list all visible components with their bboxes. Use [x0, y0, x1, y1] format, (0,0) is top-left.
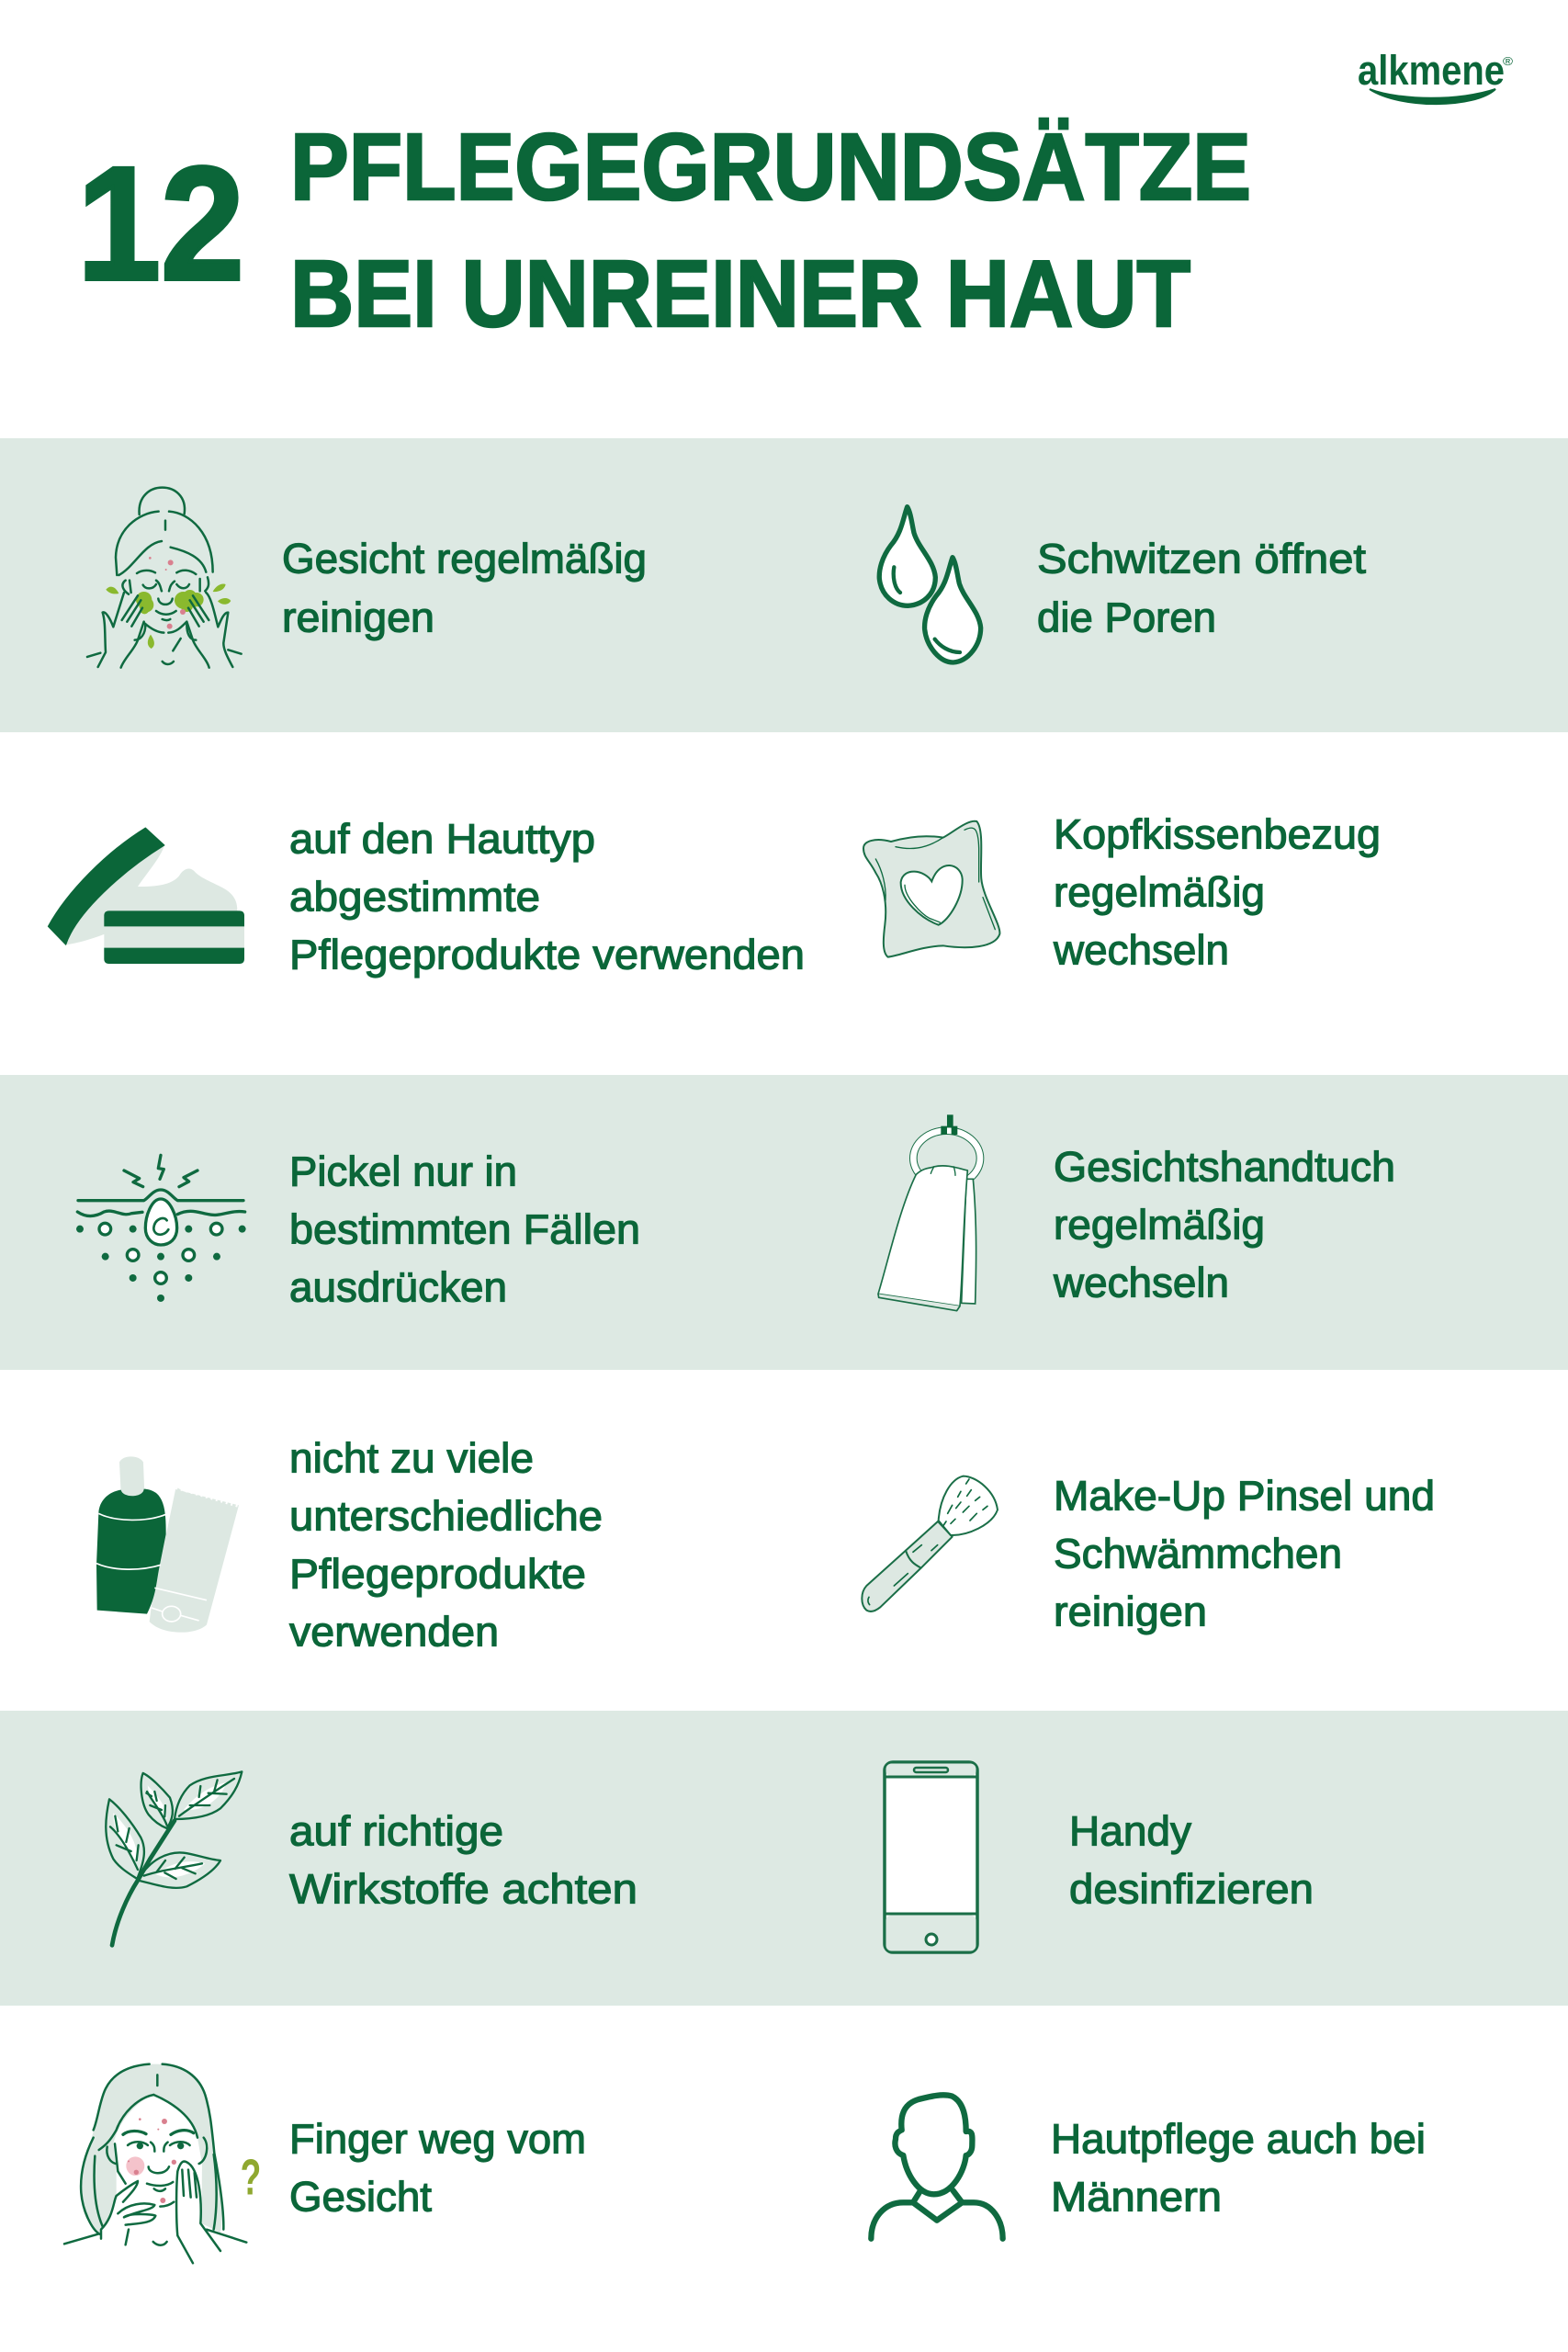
text: Finger weg vom Gesicht: Gesicht	[289, 2174, 432, 2220]
panel: row 6	[0, 2006, 1568, 2352]
number 12: 12	[77, 134, 244, 314]
text: auf richtige Wirkstoffe achten	[289, 1808, 637, 1913]
text: Kopfkissenbezug regelmäßig wechseln: Kopfkissenbezug	[1054, 810, 1381, 858]
text: Kopfkissenbezug regelmäßig wechseln	[1053, 810, 1381, 974]
icon: cream jar	[48, 828, 244, 964]
icon: woman cleansing face	[87, 488, 242, 668]
text: Gesichtshandtuch regelmäßig wechseln: regelmäßig	[1054, 1202, 1265, 1248]
icon: towel on ring	[878, 1114, 980, 1311]
title: BEI UNREINER HAUT	[290, 241, 1190, 346]
text: Schwitzen öffnet die Poren: Schwitzen öffnet	[1037, 535, 1367, 582]
text: nicht zu viele unterschiedliche Pflegeprodukte verwenden: Pflegeprodukte	[289, 1551, 586, 1597]
text: nicht zu viele unterschiedliche Pflegeprodukte verwenden: unterschiedliche	[289, 1492, 603, 1540]
text: Finger weg vom Gesicht: Finger weg vom	[289, 2115, 586, 2163]
text: Hautpflege auch bei Männern: Männern	[1051, 2174, 1222, 2220]
icon: leaf branch	[106, 1771, 242, 1945]
text: Hautpflege auch bei Männern	[1051, 2115, 1426, 2220]
text: Gesichtshandtuch regelmäßig wechseln	[1053, 1143, 1395, 1306]
text: Handy desinfizieren: Handy	[1069, 1808, 1192, 1854]
text: Gesicht regelmäßig reinigen: reinigen	[282, 594, 434, 641]
text: auf richtige Wirkstoffe achten: auf richtige	[289, 1808, 503, 1854]
text: Gesicht regelmäßig reinigen: Gesicht regelmäßig	[282, 535, 647, 582]
icon: woman touching face: ?	[241, 2148, 261, 2205]
icon: man silhouette	[871, 2095, 1003, 2239]
text: Make-Up Pinsel und Schwämmchen reinigen: reinigen	[1054, 1588, 1207, 1635]
text: Pickel nur in bestimmten Fällen ausdrücken: bestimmten Fällen	[289, 1205, 640, 1253]
text: Kopfkissenbezug regelmäßig wechseln: regelmäßig	[1054, 869, 1265, 915]
text: Gesichtshandtuch regelmäßig wechseln: Gesichtshandtuch	[1054, 1143, 1395, 1191]
text: Gesicht regelmäßig reinigen	[282, 535, 647, 641]
text: Kopfkissenbezug regelmäßig wechseln: wechseln	[1053, 926, 1229, 974]
panel: row 1	[0, 438, 1568, 732]
text: Pickel nur in bestimmten Fällen ausdrücken: Pickel nur in	[289, 1148, 517, 1194]
panel: row 4	[0, 1370, 1568, 1711]
panel: row 5	[0, 1711, 1568, 2006]
text: Schwitzen öffnet die Poren	[1037, 535, 1367, 641]
text: Pickel nur in bestimmten Fällen ausdrücken	[289, 1148, 640, 1310]
text: Make-Up Pinsel und Schwämmchen reinigen	[1054, 1472, 1435, 1635]
text: auf den Hauttyp abgestimmte Pflegeprodukte verwenden: auf den Hauttyp	[289, 816, 595, 862]
icon: make-up brush	[862, 1476, 998, 1611]
text: auf den Hauttyp abgestimmte Pflegeprodukte verwenden: Pflegeprodukte verwenden	[289, 932, 805, 978]
text: nicht zu viele unterschiedliche Pflegeprodukte verwenden: verwenden	[289, 1608, 499, 1656]
text: nicht zu viele unterschiedliche Pflegeprodukte verwenden	[289, 1435, 603, 1656]
text: Finger weg vom Gesicht	[289, 2115, 586, 2220]
icon: bottle and tube	[96, 1456, 239, 1633]
text: auf richtige Wirkstoffe achten: Wirkstoffe achten	[289, 1865, 637, 1913]
icon: water drops	[879, 507, 981, 662]
panel: row 2	[0, 732, 1568, 1075]
logo: alkmene: ®	[1503, 54, 1513, 68]
text: Gesichtshandtuch regelmäßig wechseln: wechseln	[1053, 1259, 1229, 1306]
logo: alkmene: alkmene	[1358, 47, 1505, 94]
header	[0, 0, 1568, 438]
title	[290, 114, 1251, 346]
text: auf den Hauttyp abgestimmte Pflegeprodukte verwenden: abgestimmte	[289, 873, 540, 921]
title: PFLEGEGRUNDSÄTZE	[290, 114, 1251, 220]
panel: row 3	[0, 1075, 1568, 1370]
icon: smartphone	[885, 1762, 977, 1952]
icon: woman touching face	[64, 2064, 261, 2263]
icon: pimple under skin	[76, 1155, 246, 1302]
icon: pillow with heart	[863, 821, 999, 957]
text: Schwitzen öffnet die Poren: die Poren	[1037, 594, 1216, 641]
text: Make-Up Pinsel und Schwämmchen reinigen: Make-Up Pinsel und	[1054, 1472, 1435, 1520]
text: Hautpflege auch bei Männern: Hautpflege auch bei	[1051, 2115, 1426, 2163]
text: Pickel nur in bestimmten Fällen ausdrücken: ausdrücken	[289, 1264, 507, 1310]
text: nicht zu viele unterschiedliche Pflegeprodukte verwenden: nicht zu viele	[289, 1435, 534, 1481]
text: Make-Up Pinsel und Schwämmchen reinigen: Schwämmchen	[1054, 1531, 1342, 1577]
text: Handy desinfizieren	[1069, 1808, 1314, 1913]
text: auf den Hauttyp abgestimmte Pflegeprodukte verwenden	[289, 816, 805, 978]
text: Handy desinfizieren: desinfizieren	[1069, 1865, 1314, 1913]
